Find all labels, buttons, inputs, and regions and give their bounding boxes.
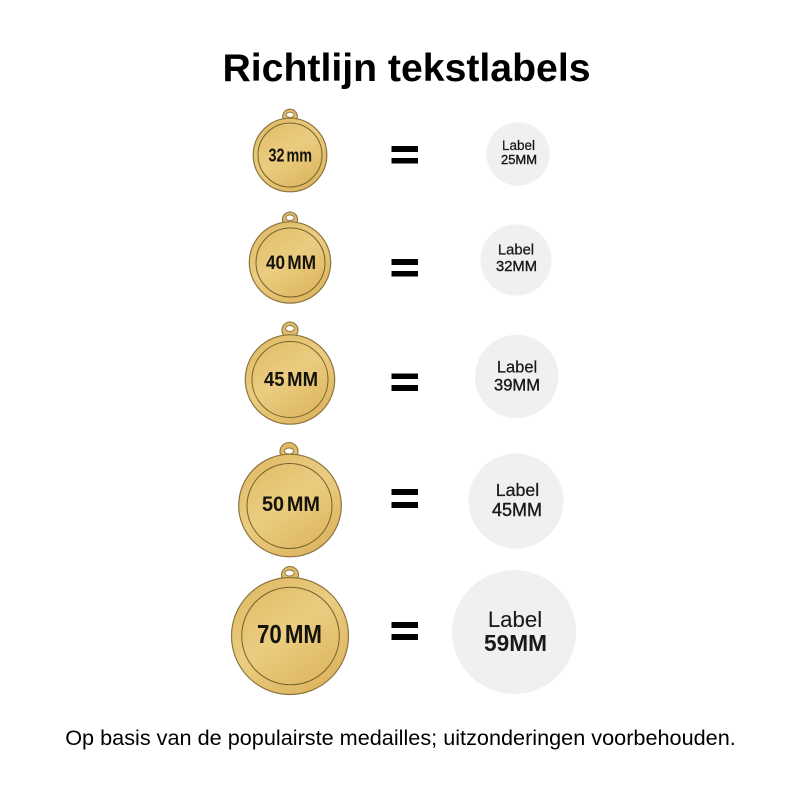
- label 25MM: 25MM: [501, 152, 537, 167]
- label 59MM: 59MM: [484, 630, 547, 656]
- equals sign: [392, 374, 418, 391]
- label 32MM: Label: [498, 242, 534, 258]
- label 59MM: [452, 570, 576, 694]
- label 45MM: [468, 454, 564, 548]
- footnote: Op basis van de populairste medailles; uitzonderingen voorbehouden.: [65, 725, 736, 750]
- medal 45 mm: 45 MM: [264, 369, 318, 391]
- label 25MM: Label: [502, 138, 535, 153]
- title: Richtlijn tekstlabels: [222, 47, 591, 90]
- label 45MM: Label: [496, 480, 539, 500]
- medal 32 mm: [253, 109, 327, 192]
- medal 70 mm: [232, 566, 348, 694]
- medal 45 mm: [245, 322, 335, 424]
- row 2: 40 mm medal equals 32MM label: [249, 212, 552, 303]
- equals sign: [392, 146, 418, 164]
- label 45MM: 45MM: [492, 500, 542, 520]
- equals sign: [392, 489, 418, 508]
- label 39MM: Label: [497, 358, 537, 376]
- label 25MM: [486, 122, 550, 186]
- label 32MM: [480, 224, 552, 296]
- equals sign: [392, 622, 418, 640]
- medal 50 mm: [239, 442, 341, 557]
- row 5: 70 mm medal equals 59MM label: [232, 566, 576, 694]
- row 4: 50 mm medal equals 45MM label: [239, 442, 563, 557]
- medal 70 mm: 70 MM: [257, 619, 322, 649]
- equals sign: [392, 259, 418, 276]
- medal 40 mm: [249, 212, 331, 303]
- label 39MM: [475, 335, 558, 418]
- row 1: 32 mm medal equals 25MM label: [253, 109, 550, 192]
- label 39MM: 39MM: [494, 376, 540, 394]
- row 3: 45 mm medal equals 39MM label: [245, 322, 558, 424]
- label 32MM: 32MM: [496, 258, 537, 275]
- medal 40 mm: 40 MM: [266, 252, 316, 274]
- label 59MM: Label: [488, 607, 542, 632]
- medal 32 mm: 32 mm: [269, 146, 312, 166]
- medal 50 mm: 50 MM: [262, 492, 320, 516]
